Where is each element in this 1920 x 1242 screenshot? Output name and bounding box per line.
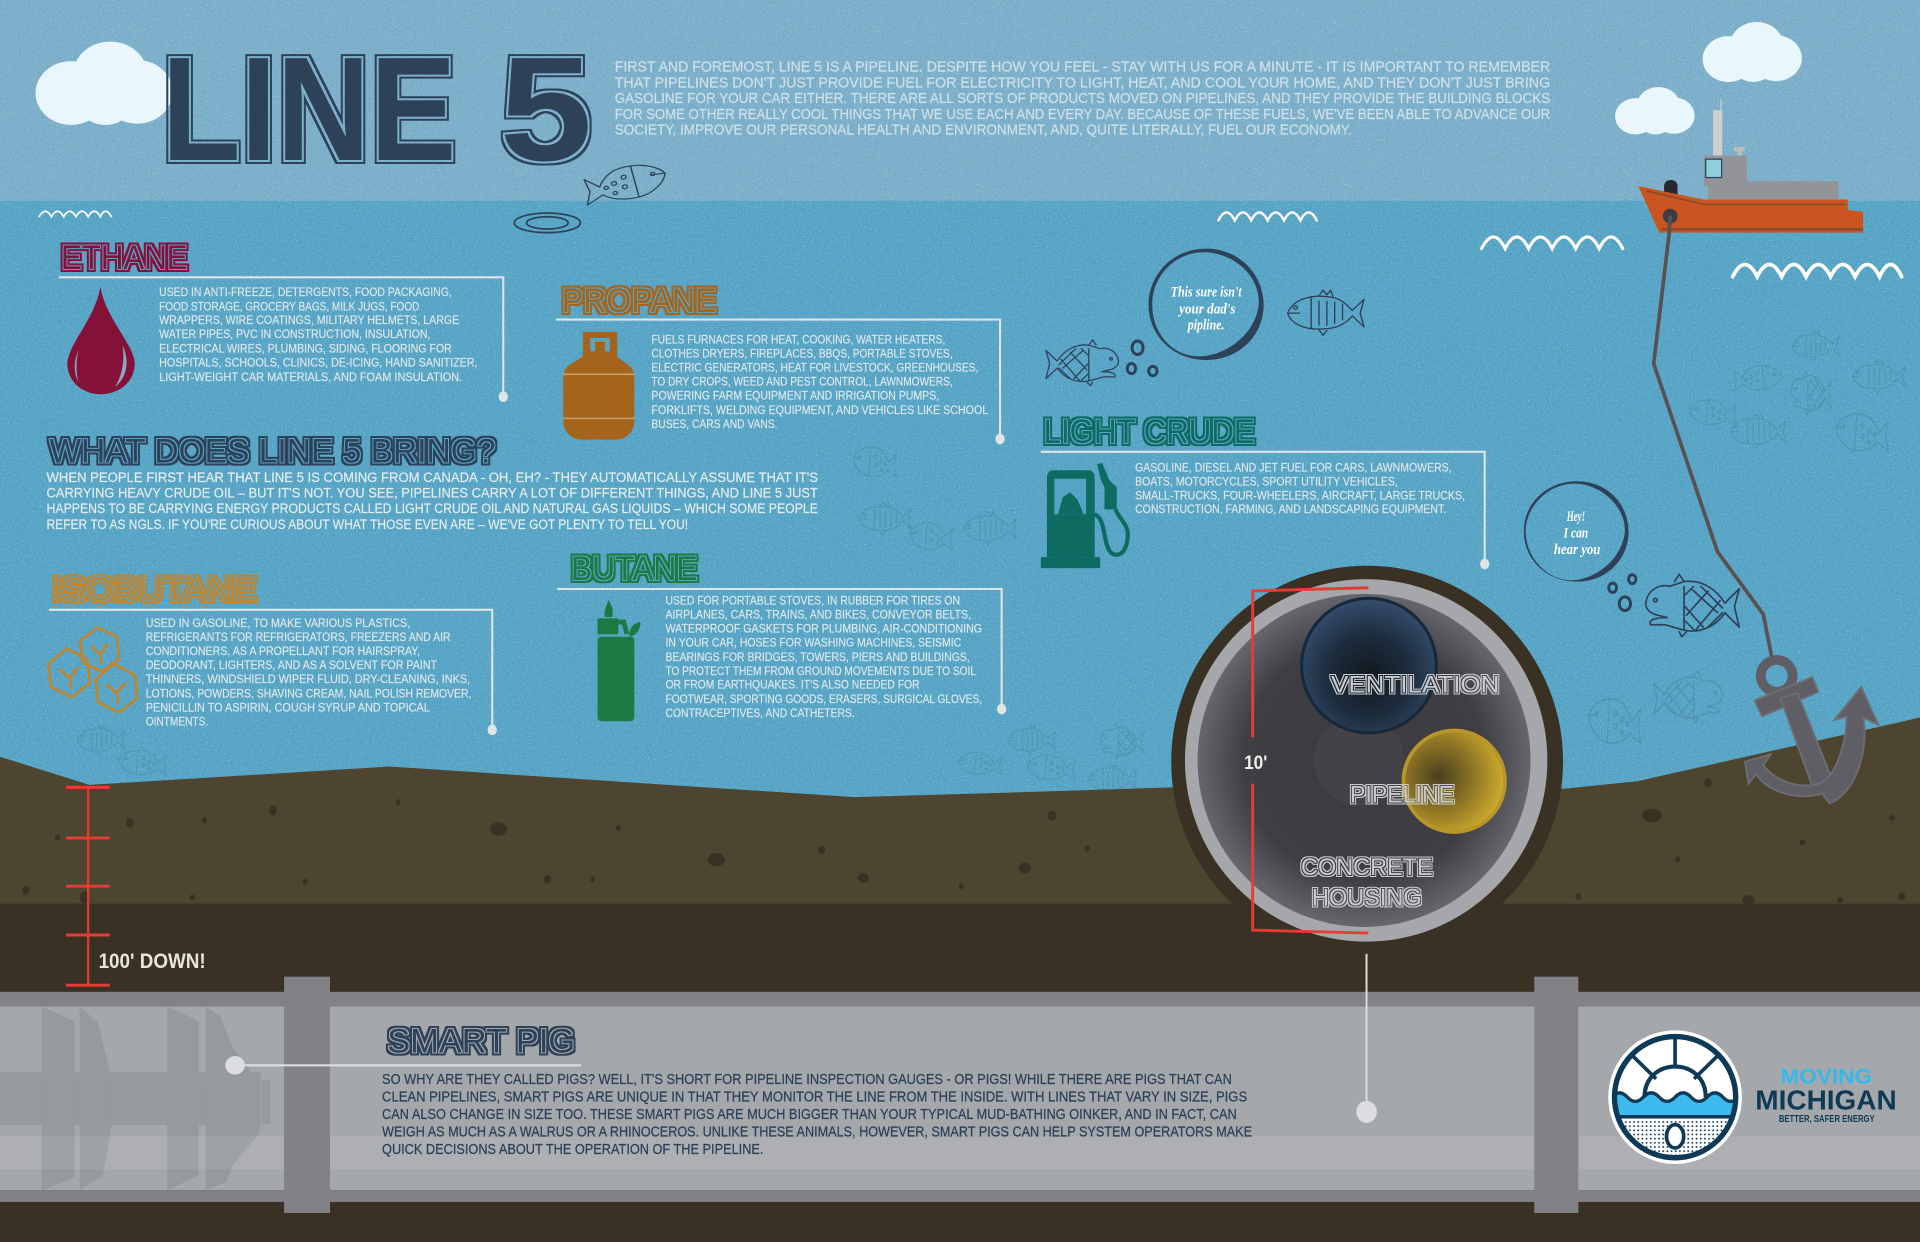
icon: anchor	[1745, 660, 1878, 803]
text: isobutane uses: DEODORANT, LIGHTERS, AND AS A SOLVENT FOR PAINT	[146, 658, 438, 672]
text: propane uses: FORKLIFTS, WELDING EQUIPMENT, AND VEHICLES LIKE SCHOOL	[651, 403, 988, 417]
icon: gas pump	[1041, 463, 1128, 568]
icon: ice cubes	[47, 626, 138, 715]
heading: what does line 5 bring: WHAT DOES LINE 5 BRING?	[49, 432, 496, 470]
text: smart pig: QUICK DECISIONS ABOUT THE OPERATION OF THE PIPELINE.	[382, 1142, 763, 1158]
intro text block	[615, 60, 1550, 139]
text: light crude uses: CONSTRUCTION, FARMING, AND LANDSCAPING EQUIPMENT.	[1135, 502, 1446, 516]
heading: light crude: LIGHT CRUDE	[1044, 413, 1255, 451]
text: isobutane uses: CONDITIONERS, AS A PROPELLANT FOR HAIRSPRAY,	[146, 644, 420, 658]
cloud near ship	[1615, 87, 1695, 134]
text: ethane uses: HOSPITALS, SCHOOLS, CLINICS, DE-ICING, HAND SANITIZER,	[159, 356, 478, 370]
panel: what does line 5 bring	[47, 432, 819, 532]
title: LINE	[162, 27, 456, 192]
speech bubble: hey i can hear you: hear you	[1554, 542, 1600, 558]
text: butane uses: CONTRACEPTIVES, AND CATHETERS.	[666, 706, 855, 720]
text: explanation: HAPPENS TO BE CARRYING ENERGY PRODUCTS CALLED LIGHT CRUDE OIL AND NATURAL GAS LIQUIDS – WHICH SOME PEOPLE	[47, 501, 818, 516]
panel: propane	[556, 282, 1005, 444]
text: butane uses: IN YOUR CAR, HOSES FOR WASHING MACHINES, SEISMIC	[666, 635, 961, 649]
text: explanation: REFER TO AS NGLS. IF YOU'RE CURIOUS ABOUT WHAT THOSE EVEN ARE – WE'VE GOT PLENTY TO TELL YOU!	[47, 517, 688, 532]
depth scale	[66, 787, 206, 985]
logo wordmark: michigan: MICHIGAN	[1755, 1084, 1897, 1115]
text: butane uses: TO PROTECT THEM FROM GROUND MOVEMENTS DUE TO SOIL	[666, 664, 976, 678]
rope	[1654, 216, 1772, 658]
intro text block: GASOLINE FOR YOUR CAR EITHER. THERE ARE ALL SORTS OF PRODUCTS MOVED ON PIPELINES, AND THEY PROVIDE THE BUILDING BLOCKS	[615, 91, 1550, 107]
text: isobutane uses	[146, 616, 471, 728]
logo tagline: BETTER, SAFER ENERGY	[1779, 1113, 1875, 1125]
speech bubble: hey i can hear you	[1524, 481, 1629, 582]
panel: pipeline section	[0, 954, 1920, 1213]
logo wordmark: moving: MOVING	[1780, 1066, 1872, 1089]
panel: light crude	[1041, 413, 1489, 569]
text: explanation: WHEN PEOPLE FIRST HEAR THAT LINE 5 IS COMING FROM CANADA - OH, EH? - THEY AUTOMATICALLY ASSUME THAT IT'S	[47, 470, 818, 485]
text: butane uses	[666, 594, 982, 720]
text: butane uses: WATERPROOF GASKETS FOR PLUMBING, AIR-CONDITIONING	[666, 621, 982, 635]
text: butane uses: USED FOR PORTABLE STOVES, IN RUBBER FOR TIRES ON	[666, 594, 960, 608]
logo emblem	[1604, 1029, 1746, 1164]
label: ventilation: VENTILATION	[1331, 671, 1499, 698]
speech bubble: dad's pipeline	[1149, 249, 1264, 360]
pointer line to pig	[235, 1064, 581, 1066]
text: isobutane uses: THINNERS, WINDSHIELD WIPER FLUID, DRY-CLEANING, INKS,	[146, 672, 470, 686]
text: isobutane uses: OINTMENTS.	[146, 714, 208, 728]
intro text block: FOR SOME OTHER REALLY COOL THINGS THAT WE USE EACH AND EVERY DAY. BECAUSE OF THESE FUELS, WE'VE BEEN ABLE TO ADVANCE OUR	[615, 107, 1550, 123]
label: 10 feet: 10'	[1244, 752, 1267, 774]
heading: butane: BUTANE	[571, 550, 698, 588]
text: light crude uses: GASOLINE, DIESEL AND JET FUEL FOR CARS, LAWNMOWERS,	[1135, 460, 1452, 474]
intro text block: THAT PIPELINES DON'T JUST PROVIDE FUEL FOR ELECTRICITY TO LIGHT, HEAT, AND COOL YOUR HOME, AND THEY DON'T JUST BRING	[615, 76, 1550, 92]
sky background	[0, 0, 1920, 202]
logo: moving michigan	[1604, 1029, 1897, 1164]
waves	[39, 211, 1902, 277]
text: ethane uses: WATER PIPES, PVC IN CONSTRUCTION, INSULATION,	[159, 327, 430, 341]
ventilation pipe	[1302, 598, 1436, 733]
water background	[0, 201, 1920, 813]
label: pipeline: PIPELINE	[1350, 781, 1454, 808]
text: isobutane uses: USED IN GASOLINE, TO MAKE VARIOUS PLASTICS,	[146, 616, 410, 630]
text: smart pig	[382, 1072, 1252, 1158]
text: ethane uses: ELECTRICAL WIRES, PLUMBING, SIDING, FLOORING FOR	[159, 342, 452, 356]
text: explanation	[47, 470, 819, 532]
panel: ship	[1638, 99, 1863, 233]
text: butane uses: OR FROM EARTHQUAKES. IT'S ALSO NEEDED FOR	[666, 678, 920, 692]
text: propane uses: POWERING FARM EQUIPMENT AND IRRIGATION PUMPS,	[651, 389, 939, 403]
intro text block: FIRST AND FOREMOST, LINE 5 IS A PIPELINE. DESPITE HOW YOU FEEL - STAY WITH US FOR A MINUTE - IT IS IMPORTANT TO REMEMBER	[615, 60, 1550, 76]
text: butane uses: FOOTWEAR, SPORTING GOODS, ERASERS, SURGICAL GLOVES,	[666, 692, 982, 706]
text: ethane uses: WRAPPERS, WIRE COATINGS, MILITARY HELMETS, LARGE	[159, 313, 459, 327]
text: propane uses	[651, 332, 988, 431]
pointer line to section	[1366, 954, 1368, 1112]
icon: ripple	[514, 213, 580, 233]
leader line	[1041, 452, 1485, 564]
icon: lighter	[598, 600, 640, 721]
heading: propane: PROPANE	[562, 282, 717, 320]
text: butane uses: AIRPLANES, CARS, TRAINS, AND BIKES, CONVEYOR BELTS,	[666, 607, 971, 621]
text: smart pig: WEIGH AS MUCH AS A WALRUS OR A RHINOCEROS. UNLIKE THESE ANIMALS, HOWEVER, SMART PIGS CAN HELP SYSTEM OPERATORS MAKE	[382, 1125, 1252, 1141]
pipe flange left	[284, 977, 330, 1213]
leader line	[557, 589, 1002, 709]
leader line	[59, 277, 503, 397]
text: propane uses: BUSES, CARS AND VANS.	[651, 417, 778, 431]
text: light crude uses: SMALL-TRUCKS, FOUR-WHEELERS, AIRCRAFT, LARGE TRUCKS,	[1135, 489, 1465, 503]
text: ethane uses: USED IN ANTI-FREEZE, DETERGENTS, FOOD PACKAGING,	[159, 285, 452, 299]
leader line	[556, 320, 1000, 439]
icon: sky fish	[583, 161, 668, 205]
panel: ethane	[59, 239, 508, 402]
speech bubble: dad's pipeline: pipline.	[1186, 317, 1224, 333]
label: concrete: CONCRETE	[1301, 854, 1433, 881]
panel: pipe cross section	[1171, 566, 1563, 958]
text: ethane uses: LIGHT-WEIGHT CAR MATERIALS, AND FOAM INSULATION.	[159, 370, 462, 384]
speech bubble: dad's pipeline: This sure isn't	[1171, 284, 1242, 300]
icon: scaled fish with bubbles	[1046, 340, 1157, 386]
text: butane uses: BEARINGS FOR BRIDGES, TOWERS, PIERS AND BUILDINGS,	[666, 650, 970, 664]
heading: isobutane: ISOBUTANE	[52, 571, 257, 609]
ground pebbles	[22, 778, 1905, 905]
text: smart pig: SO WHY ARE THEY CALLED PIGS? WELL, IT'S SHORT FOR PIPELINE INSPECTION GAUGES - OR PIGS! WHILE THERE ARE PIGS THAT CAN	[382, 1072, 1232, 1088]
text: isobutane uses: REFRIGERANTS FOR REFRIGERATORS, FREEZERS AND AIR	[146, 630, 451, 644]
speech bubble: dad's pipeline: your dad's	[1177, 301, 1236, 317]
heading: ethane: ETHANE	[61, 239, 188, 277]
dimension bracket	[1253, 588, 1368, 933]
pipe flange right	[1534, 977, 1578, 1213]
sea floor ground	[0, 718, 1920, 1242]
speech bubble: hey i can hear you: Hey!	[1566, 509, 1585, 525]
text: ethane uses	[159, 285, 478, 384]
text: propane uses: TO DRY CROPS, WEED AND PEST CONTROL, LAWNMOWERS,	[651, 375, 953, 389]
text: isobutane uses: PENICILLIN TO ASPIRIN, COUGH SYRUP AND TOPICAL	[146, 700, 430, 714]
cloud left	[36, 42, 173, 125]
text: smart pig: CAN ALSO CHANGE IN SIZE TOO. THESE SMART PIGS ARE MUCH BIGGER THAN YOUR TYPICAL MUD-BATHING OINKER, AND IN FACT, CAN	[382, 1107, 1237, 1123]
title: 5	[500, 27, 592, 192]
icon: striped fish	[1288, 290, 1364, 335]
background ghost fish	[77, 331, 1905, 794]
text: smart pig: CLEAN PIPELINES, SMART PIGS ARE UNIQUE IN THAT THEY MONITOR THE LINE FROM THE INSIDE. WITH LINES THAT VARY IN SIZE, PIGS	[382, 1090, 1247, 1106]
speech bubble: hey i can hear you: I can	[1563, 526, 1588, 542]
smart pig device	[0, 1007, 271, 1190]
icon: drop	[67, 287, 135, 394]
icon: fish with bubbles near anchor	[1609, 574, 1739, 637]
text: propane uses: CLOTHES DRYERS, FIREPLACES, BBQS, PORTABLE STOVES,	[651, 346, 953, 360]
text: light crude uses: BOATS, MOTORCYCLES, SPORT UTILITY VEHICLES,	[1135, 474, 1398, 488]
text: isobutane uses: LOTIONS, POWDERS, SHAVING CREAM, NAIL POLISH REMOVER,	[146, 686, 471, 700]
text: ethane uses: FOOD STORAGE, GROCERY BAGS, MILK JUGS, FOOD	[159, 299, 420, 313]
text: propane uses: ELECTRIC GENERATORS, HEAT FOR LIVESTOCK, GREENHOUSES,	[651, 361, 978, 375]
intro text block: SOCIETY, IMPROVE OUR PERSONAL HEALTH AND ENVIRONMENT, AND, QUITE LITERALLY, FUEL OUR ECONOMY.	[615, 123, 1352, 139]
text: propane uses: FUELS FURNACES FOR HEAT, COOKING, WATER HEATERS,	[651, 332, 945, 346]
text: light crude uses	[1135, 460, 1465, 516]
label: housing: HOUSING	[1312, 885, 1422, 912]
icon: propane tank	[563, 332, 634, 440]
panel: butane	[557, 550, 1006, 721]
text: explanation: CARRYING HEAVY CRUDE OIL – BUT IT'S NOT. YOU SEE, PIPELINES CARRY A LOT OF DIFFERENT THINGS, AND LINE 5 JUST	[47, 485, 819, 500]
panel: isobutane	[47, 571, 497, 735]
heading: smart pig: SMART PIG	[387, 1023, 575, 1061]
leader line	[49, 610, 492, 730]
oil pipeline	[1403, 730, 1505, 832]
cloud upper right	[1703, 22, 1802, 82]
deep ground layer	[0, 904, 1920, 1242]
label: 100 feet down: 100' DOWN!	[99, 950, 206, 973]
